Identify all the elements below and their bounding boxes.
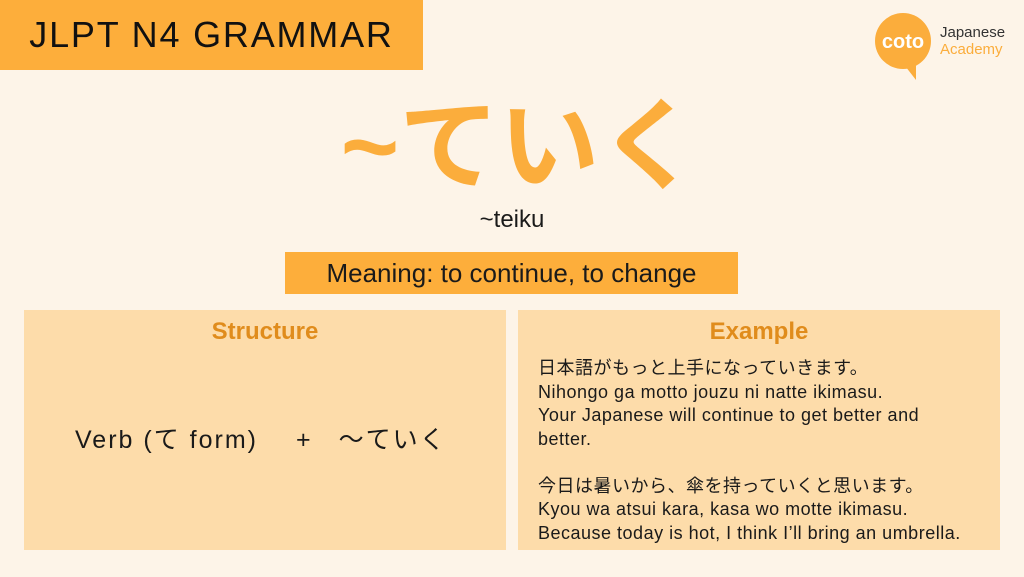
example sentences: Kyou wa atsui kara, kasa wo motte ikimasu. — [538, 499, 908, 519]
example sentences: 日本語がもっと上手になっていきます。 — [538, 358, 868, 378]
logo: coto Japanese Academy: Japanese — [940, 24, 1005, 41]
logo: coto Japanese Academy — [875, 13, 1005, 80]
logo: coto Japanese Academy: Academy — [940, 41, 1003, 58]
heading: Example: Example — [710, 318, 808, 345]
heading: Structure: Structure — [212, 318, 318, 345]
example sentences: better. — [538, 428, 592, 448]
example sentences: Because today is hot, I think I’ll bring an umbrella. — [538, 522, 961, 542]
example sentences — [538, 358, 961, 543]
example sentences: 今日は暑いから、傘を持っていくと思います。 — [538, 476, 924, 496]
panel: example — [518, 310, 1000, 550]
header: JLPT N4 GRAMMAR: JLPT N4 GRAMMAR — [29, 14, 394, 55]
example sentences: Your Japanese will continue to get better and — [538, 405, 919, 425]
title: ~ていく: ~ていく — [341, 91, 699, 203]
meaning box: Meaning: to continue, to change — [326, 258, 697, 288]
panel: structure — [24, 310, 506, 550]
meaning box — [285, 252, 738, 294]
romaji: ~teiku: ~teiku — [480, 206, 544, 233]
structure formula: Verb (て form) + ～ていく — [75, 426, 447, 454]
logo: coto Japanese Academy: coto — [882, 31, 924, 53]
example sentences: Nihongo ga motto jouzu ni natte ikimasu. — [538, 382, 883, 402]
header: JLPT N4 GRAMMAR — [0, 0, 423, 70]
